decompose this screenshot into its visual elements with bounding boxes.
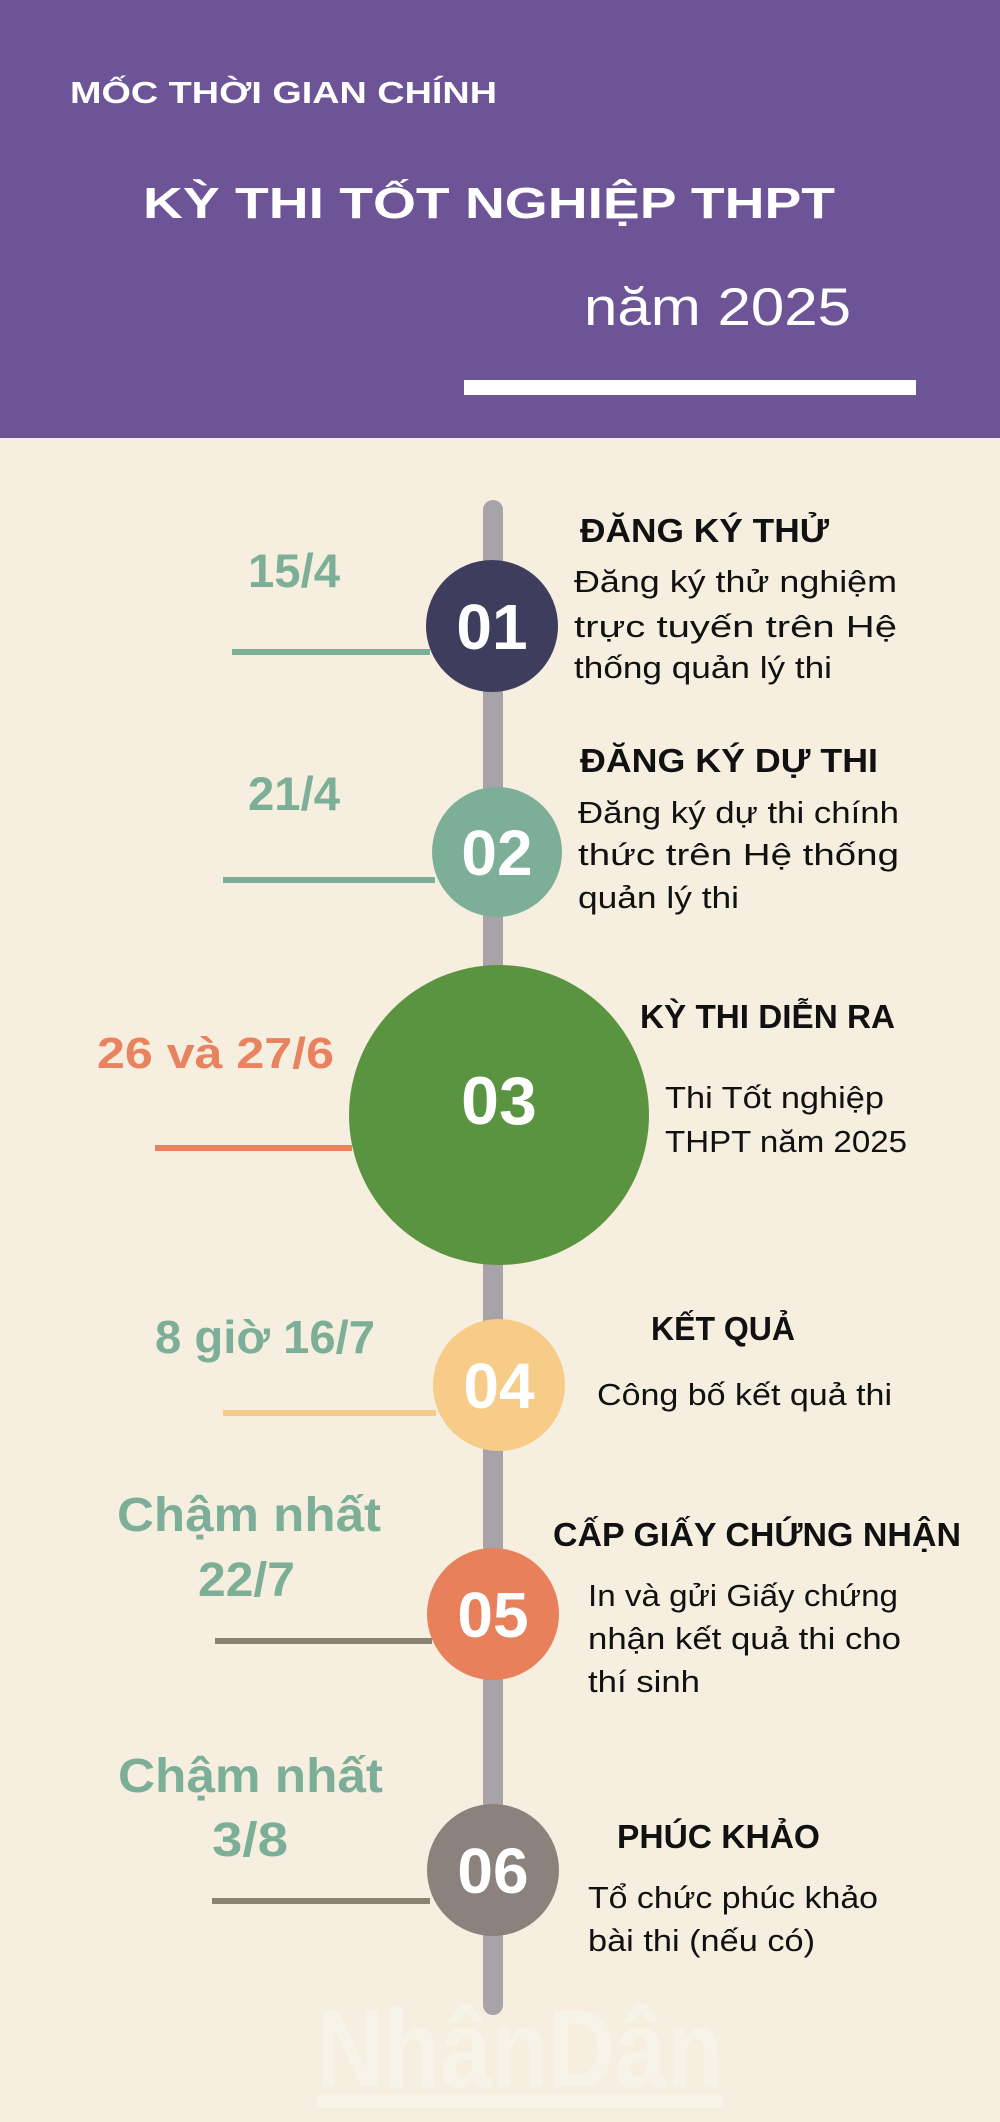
circle 03 [349,965,649,1265]
circle 01 [426,560,558,692]
date 03: 26 và 27/6 [97,1029,334,1078]
heading 01: ĐĂNG KÝ THỬ [580,512,830,549]
circle 01: 01 [456,591,528,663]
circle 04: 04 [463,1350,535,1422]
body 04: Công bố kết quả thi [597,1377,892,1412]
body 01: trực tuyến trên Hệ [574,609,897,644]
heading 06: PHÚC KHẢO [617,1818,820,1855]
circle 03: 03 [461,1063,537,1139]
circle 06: 06 [457,1835,529,1907]
date 01: 15/4 [248,544,340,597]
body 05: nhận kết quả thi cho [588,1621,901,1656]
heading 04: KẾT QUẢ [651,1310,795,1347]
body 01 [574,564,897,685]
circle 05 [427,1548,559,1680]
body 03: Thi Tốt nghiệp [665,1080,884,1115]
circle 06 [427,1804,559,1936]
white bar [464,380,916,395]
heading 02: ĐĂNG KÝ DỰ THI [580,742,878,779]
date 05: Chậm nhất [117,1489,381,1542]
main title: KỲ THI TỐT NGHIỆP THPT [143,177,835,228]
year: năm 2025 [584,278,851,337]
date 06 [118,1750,383,1867]
circle 05: 05 [457,1579,529,1651]
body 02: thức trên Hệ thống [578,837,899,872]
body 05 [588,1578,901,1699]
date 05 [117,1489,381,1607]
step 03 [97,965,907,1265]
date 06: 3/8 [212,1814,288,1867]
connector lines [155,652,436,1901]
body 02: Đăng ký dự thi chính [578,795,899,830]
body 05: thí sinh [588,1664,700,1699]
subtitle: MỐC THỜI GIAN CHÍNH [70,74,497,110]
circle 04 [433,1319,565,1451]
body 02 [578,795,899,915]
date 05: 22/7 [198,1554,295,1607]
body 06: bài thi (nếu có) [588,1923,815,1958]
date 06: Chậm nhất [118,1750,383,1803]
body 06 [588,1880,878,1958]
watermark: NhânDân [317,1988,723,2111]
step 04 [155,1310,892,1451]
circle 02: 02 [461,817,533,889]
step 05 [117,1489,961,1699]
timeline axis [483,500,503,2015]
body 06: Tổ chức phúc khảo [588,1880,878,1915]
date 02: 21/4 [248,767,340,820]
header panel [0,0,1000,438]
heading 03: KỲ THI DIỄN RA [640,998,895,1035]
circle 02 [432,787,562,917]
step 01 [248,512,897,692]
body 05: In và gửi Giấy chứng [588,1578,898,1613]
body 01: thống quản lý thi [574,650,832,685]
heading 05: CẤP GIẤY CHỨNG NHẬN [553,1516,961,1553]
step 02 [248,742,899,917]
body 02: quản lý thi [578,880,739,915]
body 03: THPT năm 2025 [665,1124,907,1159]
body 03 [665,1080,907,1159]
date 04: 8 giờ 16/7 [155,1311,375,1363]
step 06 [118,1750,878,1958]
body 01: Đăng ký thử nghiệm [574,564,897,599]
